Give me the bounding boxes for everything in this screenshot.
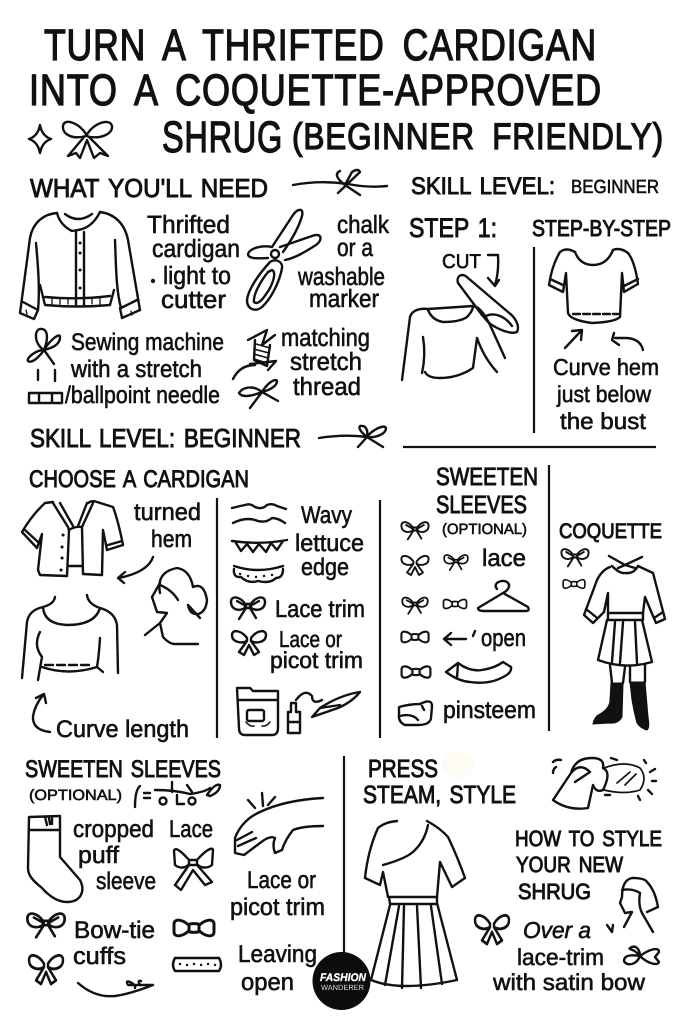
heading: press steam style — [363, 755, 516, 809]
icon: cardigan — [20, 212, 140, 319]
icon: picot bow — [232, 631, 266, 655]
divider — [548, 465, 550, 731]
text: matching stretch thread — [281, 324, 370, 401]
panel: sweeten sleeves optional middle — [399, 463, 549, 731]
heading: what you'll need: WHAT YOU'LL NEED — [30, 173, 268, 203]
icon: cropped top — [549, 249, 638, 323]
panel: how to style — [475, 826, 662, 995]
heading: coquette: COQUETTE — [559, 520, 662, 543]
icon: lace edge — [234, 566, 283, 582]
text: chalk or marker — [297, 211, 389, 313]
text: curve hem: Curve hem — [553, 354, 659, 380]
text: sewing machine: /ballpoint needle — [65, 382, 220, 409]
heading: sweeten sleeves — [25, 756, 221, 804]
icon: lettuce edge — [232, 540, 287, 552]
heading: sweeten sleeves: (OPTIONAL) — [29, 787, 122, 804]
icon: lace bow — [231, 597, 265, 619]
heading: step 1: STEP 1: — [409, 213, 497, 243]
label: cut: CUT — [442, 251, 481, 273]
icon: sparkle and bow — [29, 122, 112, 158]
heading: press steam style: STEAM, STYLE — [363, 781, 516, 809]
arrow: turned hem — [118, 557, 153, 583]
panel: skill level and step 1 — [402, 173, 671, 447]
label: pinsteem: pinsteem — [443, 697, 536, 724]
text: cropped puff sleeve — [73, 816, 156, 895]
text: sewing machine: with a stretch — [70, 356, 202, 383]
icon: supply box — [237, 688, 278, 735]
panel: coquette — [559, 520, 665, 730]
heading: skill level right: BEGINNER — [571, 177, 659, 198]
text: curve hem: the bust — [560, 408, 647, 434]
label: lettuce edge — [295, 530, 364, 581]
text: thrifted cardigan: cutter — [161, 286, 226, 314]
heading: sweeten sleeves — [436, 463, 538, 538]
text: thrifted cardigan: Thrifted — [147, 211, 230, 239]
text: sewing machine — [65, 329, 224, 409]
divider — [343, 756, 345, 953]
heading: sweeten sleeves: SWEETEN SLEEVES — [25, 756, 221, 783]
icon: woman's head with bun — [145, 568, 207, 644]
heading: sweeten sleeves: SLEEVES — [436, 491, 527, 519]
panel: sweeten sleeves bottom — [25, 756, 325, 996]
label: turned hem: turned — [134, 499, 201, 526]
text: over a lace-trim — [492, 917, 645, 995]
icon: black boots — [593, 682, 649, 730]
icons: bow column — [401, 522, 468, 678]
logo: fashion wanderer: FASHION — [320, 972, 367, 984]
icon: ribbon divider — [293, 170, 387, 195]
icon: bow under spool — [239, 380, 278, 408]
label: open: open — [481, 625, 526, 652]
icons: coquette bows — [561, 549, 589, 588]
title: SHRUG — [162, 113, 283, 162]
label: lettuce edge: lettuce — [295, 530, 364, 557]
text: bow-tie cuffs — [73, 917, 155, 970]
icon: torso with cropped hem — [22, 595, 118, 680]
icon: lace band — [173, 958, 221, 971]
icon: swoosh — [78, 981, 153, 996]
label: lace or picot trim: picot trim — [270, 647, 363, 673]
arrow: open — [444, 631, 475, 645]
text: bow-tie cuffs: cuffs — [73, 943, 126, 970]
icon: head profile — [620, 878, 658, 932]
text: matching stretch thread: matching — [281, 324, 370, 352]
text: over a lace-trim: Over a — [523, 917, 591, 943]
heading: how to style: SHRUG — [518, 879, 591, 904]
label: lace: lace — [482, 545, 526, 572]
icon: folded fabric — [399, 701, 432, 725]
label: lace trim: Lace trim — [275, 596, 365, 623]
heading: sweeten sleeves: SWEETEN — [436, 463, 538, 491]
arrow: cut — [488, 255, 499, 286]
icon: needle and thread — [296, 692, 360, 717]
heading: choose a cardigan: CHOOSE A CARDIGAN — [29, 466, 249, 493]
icon: small bow — [174, 920, 214, 936]
icon: sleeve being cut — [402, 275, 518, 380]
text: thrifted cardigan: light to — [163, 262, 231, 290]
label: leaving open: open — [241, 969, 294, 996]
logo: fashion wanderer — [312, 952, 370, 1010]
text: cropped puff sleeve: cropped — [73, 816, 154, 843]
label: lace or picot trim: picot trim — [230, 894, 325, 921]
text: over a lace-trim: with satin bow — [492, 969, 645, 995]
label: lace or picot trim — [230, 867, 325, 921]
text: matching stretch thread: stretch — [290, 348, 362, 376]
icon: hand with rays — [235, 793, 323, 855]
label: lettuce edge: edge — [301, 554, 349, 581]
heading: skill level right — [411, 173, 659, 200]
label: lace or picot trim: Lace or — [247, 867, 316, 894]
heading: how to style — [515, 826, 662, 904]
icon: bow left — [475, 915, 509, 944]
text: over a lace-trim: lace-trim — [517, 944, 604, 970]
icon: sock — [28, 816, 82, 902]
label: leaving open — [238, 941, 317, 996]
label: turned hem: hem — [151, 526, 192, 553]
label: lace or picot trim: Lace or — [279, 626, 342, 652]
text: chalk or marker: marker — [309, 285, 379, 313]
text: cropped puff sleeve: puff — [78, 842, 119, 869]
label: curve length: Curve length — [56, 716, 189, 743]
label: wavy: Wavy — [301, 502, 352, 529]
arrow: small — [607, 925, 613, 932]
icon: wavy lines — [232, 504, 286, 523]
icon: bow pair left — [27, 914, 65, 984]
icon: bow with stitches — [28, 329, 62, 403]
logo: fashion wanderer: WANDERER — [321, 983, 365, 992]
icon: large bow — [174, 849, 213, 890]
icon: hanger — [478, 581, 529, 611]
divider — [216, 498, 218, 738]
panel: press steam style — [363, 752, 656, 988]
icon: small bottle — [288, 703, 300, 733]
label: leaving open: Leaving — [238, 941, 317, 968]
icon: bow right — [624, 947, 659, 964]
text: chalk or marker: washable — [297, 263, 385, 291]
text: sewing machine: Sewing machine — [71, 329, 224, 356]
arrow: curve length — [33, 694, 50, 732]
label: turned hem — [134, 499, 201, 553]
heading: skill level left: SKILL LEVEL: BEGINNER — [30, 423, 301, 453]
heading: how to style: YOUR NEW — [516, 852, 623, 877]
icon: short-sleeve cardigan — [22, 501, 123, 576]
heading: how to style: HOW TO STYLE — [515, 826, 662, 851]
text: cropped puff sleeve: sleeve — [96, 868, 156, 895]
panel: choose a cardigan — [22, 466, 380, 743]
heading: press steam style: PRESS — [368, 755, 438, 783]
label: lace or picot trim — [270, 626, 363, 673]
icon: ribbon divider small — [319, 426, 386, 447]
icon: thread spool — [233, 330, 276, 379]
panel: what you'll need — [20, 170, 389, 409]
text: curve hem: just below — [556, 381, 651, 407]
icon: scissors — [247, 210, 321, 310]
divider — [533, 247, 535, 433]
label: lace: Lace — [169, 816, 213, 843]
text: thrifted cardigan — [147, 211, 240, 314]
icon: iron with steam — [553, 758, 656, 809]
heading: skill level right: SKILL LEVEL: — [411, 173, 555, 200]
arrows: curve hem — [565, 330, 643, 350]
divider — [403, 446, 656, 448]
heading: sweeten sleeves: (OPTIONAL) — [442, 521, 527, 538]
icon: dress with shrug — [365, 821, 465, 988]
title — [29, 21, 664, 162]
text: curve hem — [553, 354, 659, 434]
icon: trim doodle — [135, 782, 220, 807]
text: chalk or marker: or a — [337, 234, 373, 262]
text: matching stretch thread: thread — [293, 373, 361, 401]
divider — [379, 500, 381, 738]
text: thrifted cardigan: cardigan — [152, 235, 240, 263]
icon: coquette outfit — [584, 556, 665, 683]
icon: curved cuff — [446, 662, 511, 683]
text: bow-tie cuffs: Bow-tie — [74, 917, 155, 944]
text: chalk or marker: chalk — [337, 211, 389, 239]
